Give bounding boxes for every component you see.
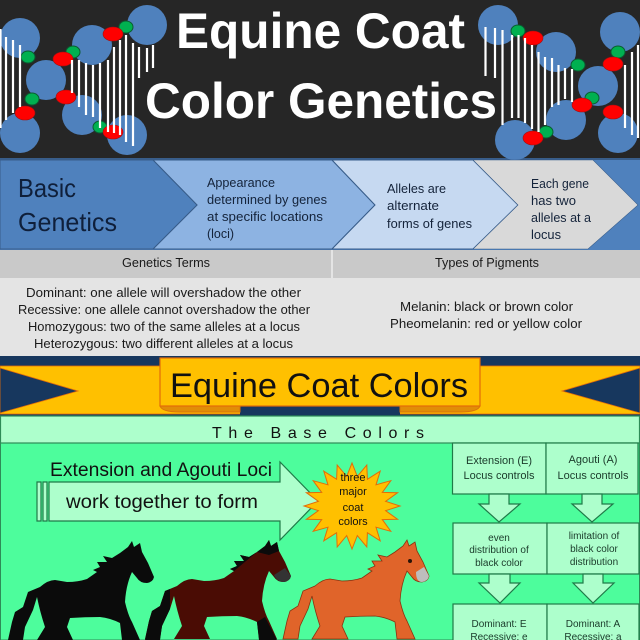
text: genetics terms list: [18, 286, 310, 351]
box: even distribution: [453, 523, 547, 574]
icon: starburst callout: major: [339, 486, 367, 498]
box: limitation of distribution: [547, 523, 639, 574]
icon: starburst callout: three: [340, 472, 366, 484]
heading: the base colors: [0, 416, 640, 443]
chevron: alleles: alternate: [387, 199, 439, 213]
icon: starburst callout: colors: [338, 516, 368, 528]
arrow: limitation down: [573, 574, 614, 603]
box: agouti locus: Agouti (A): [569, 454, 617, 466]
text: genetics terms list: Dominant: one allele will overshadow the other: [26, 286, 301, 300]
box: limitation of distribution: distribution: [570, 557, 618, 568]
arrow: agouti down: [572, 494, 613, 522]
heading: the base colors: The Base Colors: [212, 425, 424, 442]
chevron: basic genetics: Basic: [18, 173, 76, 203]
box: even distribution: distribution of: [469, 545, 529, 556]
box: extension alleles: [453, 604, 547, 640]
heading: genetics terms: Genetics Terms: [122, 256, 210, 270]
icon: orange horse: [283, 540, 429, 639]
box: agouti alleles: [547, 604, 639, 640]
box: extension alleles: Dominant: E: [471, 619, 527, 630]
header panel: [0, 0, 640, 160]
icon: DNA strand right: [478, 5, 640, 160]
text: pigments list: Pheomelanin: red or yellow color: [390, 317, 582, 331]
icon: starburst callout: coat: [343, 502, 363, 514]
box: agouti locus: [546, 443, 638, 494]
chevron: two alleles: [473, 160, 638, 249]
text: genetics terms list: Homozygous: two of the same alleles at a locus: [28, 320, 300, 334]
box: even distribution: black color: [475, 558, 524, 569]
box: limitation of distribution: limitation of: [569, 531, 620, 542]
text: genetics terms list: Recessive: one allele cannot overshadow the other: [18, 303, 310, 317]
heading: types of pigments: Types of Pigments: [435, 256, 539, 270]
panel: terms table: [0, 250, 640, 356]
chevron: alleles: Alleles are: [387, 182, 446, 196]
box: extension locus: Locus controls: [464, 470, 535, 482]
icon: starburst callout: [304, 463, 400, 549]
box: extension locus: [452, 443, 546, 494]
chevron: basic genetics: Genetics: [18, 207, 117, 237]
chevron: two alleles: locus: [531, 228, 561, 242]
title: Color Genetics: [145, 73, 497, 129]
title: [145, 3, 497, 129]
icon: black horse: [8, 541, 154, 640]
chevron: appearance: (loci): [207, 227, 234, 241]
icon: DNA strand left: [0, 5, 167, 155]
chevron: appearance: [153, 160, 375, 249]
flow chart: loci: [452, 443, 639, 640]
chevron: appearance: at specific locations: [207, 210, 323, 224]
box: even distribution: even: [488, 533, 510, 544]
banner title: Equine Coat Colors: [170, 367, 468, 405]
box: extension locus: Extension (E): [466, 455, 532, 467]
arrow: distribution down: [479, 574, 520, 603]
chevron: two alleles: alleles at a: [531, 211, 591, 225]
arrow: loci callout: Extension and Agouti Loci: [50, 460, 272, 481]
box: agouti alleles: Dominant: A: [566, 619, 621, 630]
arrow: extension down: [479, 494, 520, 522]
title: Equine Coat: [176, 3, 465, 59]
chevron: alleles: forms of genes: [387, 217, 472, 231]
chevron: alleles: [332, 160, 518, 249]
icon: brown horse: [145, 540, 291, 640]
arrow: loci callout: work together to form: [65, 492, 258, 513]
chevron: appearance: Appearance: [207, 176, 275, 190]
box: agouti locus: Locus controls: [558, 470, 629, 482]
banner: [0, 356, 640, 416]
chevron: two alleles: has two: [531, 194, 576, 208]
chevron: two alleles: Each gene: [531, 177, 589, 191]
arrow: loci callout: [37, 460, 318, 540]
chevron: basic genetics: [0, 160, 197, 249]
text: genetics terms list: Heterozygous: two different alleles at a locus: [34, 337, 293, 351]
box: limitation of distribution: black color: [570, 544, 619, 555]
text: pigments list: [390, 300, 582, 331]
text: pigments list: Melanin: black or brown color: [400, 300, 573, 314]
chevron: appearance: determined by genes: [207, 193, 327, 207]
panel: base colors: [0, 416, 640, 640]
panel: basic genetics chevrons: [0, 160, 640, 250]
